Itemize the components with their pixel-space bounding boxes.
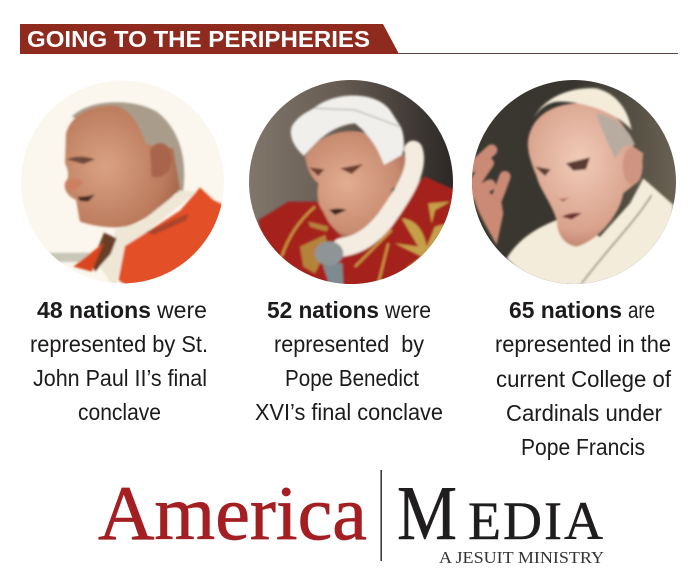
raised hand [472,150,505,245]
caption: Francis: Pope Francis [521,434,645,460]
cap edge [315,108,400,127]
hair [72,102,184,195]
dark clasp [92,233,117,272]
caption: John Paul II: were [156,297,207,323]
white cap [533,88,632,130]
embroidery [147,213,188,235]
logo: America Media: M [397,470,457,556]
neck [334,188,394,238]
logo: America Media: America [98,470,367,556]
heading text: GOING TO THE PERIPHERIES [27,26,370,52]
caption: John Paul II: represented by St. [30,331,208,357]
caption: Francis: are [628,297,655,323]
caption: John Paul II [30,297,208,425]
microphone [322,263,343,287]
caption: John Paul II: 48 nations [37,297,151,323]
white collar [100,191,197,287]
caption: Benedict XVI: Pope Benedict [285,365,420,391]
logo: America Media [98,470,604,567]
pectoral chain [582,195,652,283]
portrait: Pope Benedict XVI [249,79,458,290]
caption: Benedict XVI: 52 nations [267,297,379,323]
red robes [258,177,458,290]
caption: John Paul II: conclave [78,399,161,425]
white hair and cap [291,96,404,165]
eyes and mouth [309,164,363,176]
caption: Francis: represented in the [495,331,671,357]
white fur stole [342,150,415,247]
white cassock [507,178,673,290]
caption: Francis: Cardinals under [506,400,662,426]
caption: Benedict XVI: were [384,297,431,323]
red cape [118,187,224,290]
horizon [47,253,90,262]
header: Going to the Peripheries [20,24,678,54]
caption: Francis: 65 nations [509,297,622,323]
eye and mouth [67,157,95,164]
face [65,106,180,227]
portrait: St. John Paul II [20,79,225,290]
ear [623,147,643,185]
logo: America Media: EDIA [468,491,603,551]
eyes, nose and mouth [535,157,590,176]
ear [150,143,172,177]
grey hair [597,113,635,158]
caption: Benedict XVI: XVI’s final conclave [255,399,443,425]
left red cape [73,243,104,272]
caption: Benedict XVI: represented by [274,331,424,357]
caption: Francis: current College of [496,366,672,392]
caption: Benedict XVI [255,297,443,425]
caption: John Paul II: John Paul II’s final [33,365,207,391]
portrait: Pope Francis [472,79,676,290]
face [305,131,410,235]
face [528,103,643,247]
logo: America Media: A JESUIT MINISTRY [439,548,604,567]
caption: Francis [495,297,672,460]
gold embroidery [282,207,315,257]
